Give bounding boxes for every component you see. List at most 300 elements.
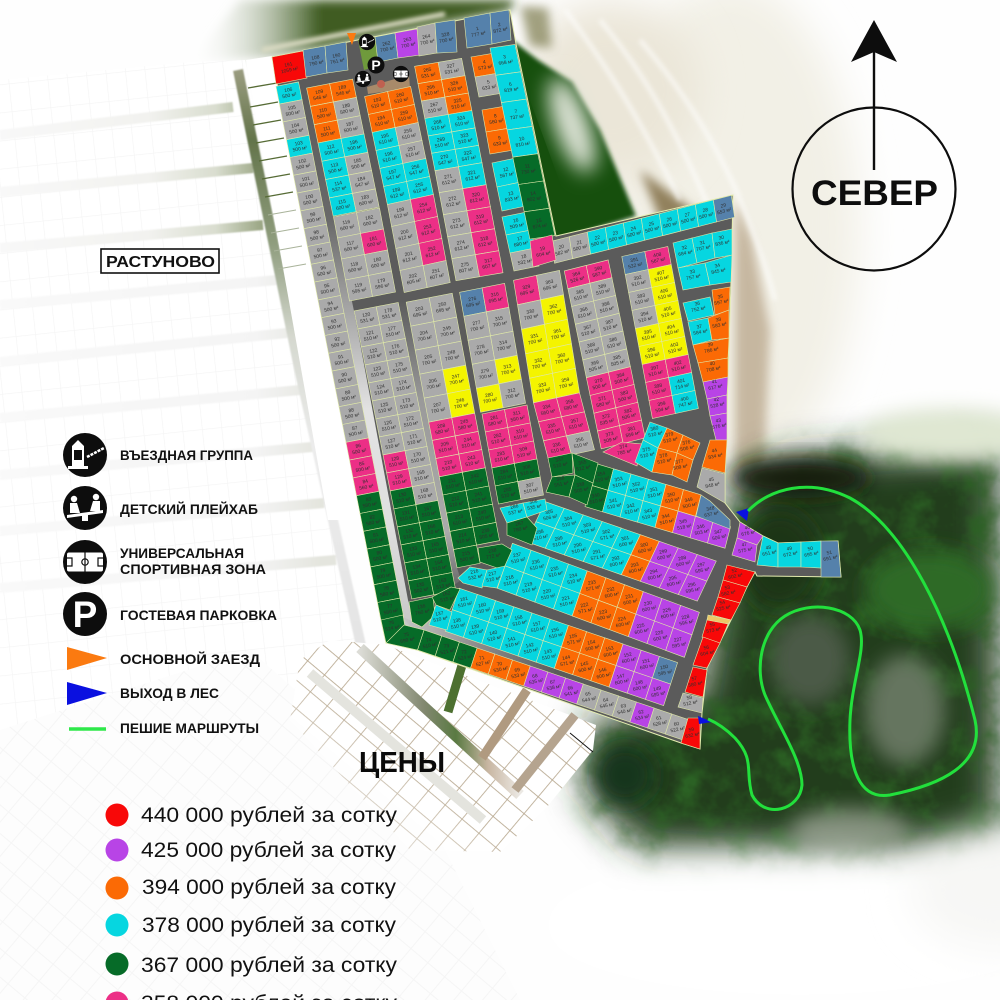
plots block: 116-119 and 182-179: 182 xyxy=(365,215,374,222)
plots block: 265-270 and 327-322: 531 м² xyxy=(421,72,437,80)
plots block: west strip 106-77: 84 xyxy=(362,480,369,485)
plots: irregular parcels: 757 м² xyxy=(686,273,702,282)
plots block: southern row 74-60: 71 xyxy=(479,656,485,662)
plots block: 329-333 and 363-359: 700 м² xyxy=(532,362,547,371)
plots block: 334-336 and 358-356: 356 xyxy=(575,437,584,444)
plots block: 120-135 and 178-163: 513 м² xyxy=(436,582,451,591)
plots block: 237-228 and 218-227: 222 xyxy=(580,603,589,609)
plots block: 161-150 and 138-149: 595 м² xyxy=(658,669,673,678)
plots block: 276-280 and 316-312: 277 xyxy=(472,321,481,327)
plots block: north-east row 20-29: 23 xyxy=(612,231,619,237)
plots block: 4-5: 573 м² xyxy=(478,64,494,72)
plots block: east strip 3-15: 10 xyxy=(519,137,525,143)
plots block: 354-349 and 340-347: 341 xyxy=(609,498,618,505)
plots block: 12-13: 13 xyxy=(508,191,514,197)
plots block: 120-135 and 178-163: 130 xyxy=(398,492,407,499)
plots block: 109-115 and 189-183: 500 м² xyxy=(343,126,359,134)
plots block: 334-336 and 358-356: 358 xyxy=(565,399,574,406)
plots block: west strip 106-77: 560 м² xyxy=(359,483,374,492)
plots block: north-east row 20-29: 28 xyxy=(702,208,709,214)
plots block: 120-135 and 178-163: 168 xyxy=(420,488,429,495)
plots block: 199-202 and 254-251: 612 м² xyxy=(398,233,414,242)
plots block: 120-135 and 178-163: 510 м² xyxy=(385,442,401,451)
plots block: 305-297 and 288-296: 305 xyxy=(545,510,554,516)
plots block: west strip 106-77: 98 xyxy=(313,230,320,236)
plots block: 120-135 and 178-163: 510 м² xyxy=(414,474,430,483)
plots: irregular parcels: 785 м² xyxy=(617,448,633,457)
plots: irregular parcels: 137 xyxy=(435,611,444,618)
plots block: 354-349 and 340-347: 510 м² xyxy=(642,512,657,521)
plots block: 199-202 and 254-251: 251 xyxy=(432,269,441,275)
plots block: 354-349 and 340-347: 340 xyxy=(591,493,600,500)
plots block: west strip 106-77: 93 xyxy=(331,319,337,325)
plots block: 305-297 and 288-296: 506 м² xyxy=(543,513,558,522)
plots block: north-east row 20-29: 500 м² xyxy=(663,221,678,230)
plots: irregular parcels: 651 м² xyxy=(762,549,778,558)
plots block: 203-207 and 250-246: 203 xyxy=(415,307,424,313)
plots block: 208-215 and 245-239: 510 м² xyxy=(438,446,454,455)
plots: irregular parcels: 51 xyxy=(826,551,833,557)
plots block: 193-198 and 260-255: 547 м² xyxy=(386,173,402,182)
plots: irregular parcels: 47 xyxy=(741,543,748,549)
plots block: 276-280 and 316-312: 700 м² xyxy=(497,344,512,353)
plots block: 281-285 and 311-307: 285 xyxy=(503,487,512,494)
plots block: east strip 3-15: 14 xyxy=(530,192,537,197)
plots block: southern row 74-60 xyxy=(418,630,690,740)
plots block: 265-270 and 327-322: 510 м² xyxy=(428,106,443,115)
plots block: 237-228 and 218-227: 600 м² xyxy=(634,627,650,636)
plots block: southern row 74-60: 535 м² xyxy=(528,677,544,686)
plots: irregular parcels: 55 xyxy=(709,623,716,629)
plots: irregular parcels: 700 м² xyxy=(420,38,436,47)
plots block: 161-150 and 138-149: 150 xyxy=(660,665,669,672)
plots block: 109-115 and 189-183: 189 xyxy=(338,85,347,92)
plots block: 265-270 and 327-322: 510 м² xyxy=(448,85,463,93)
legend text: forest exit: ВЫХОД В ЛЕС xyxy=(120,686,219,701)
plots block: 237-228 and 218-227: 226 xyxy=(655,630,664,637)
plots: irregular parcels: 525 м² xyxy=(716,604,732,613)
plots block: 391-399 and 408-400: 396 xyxy=(647,348,656,354)
plots block: 391-399 and 408-400: 510 м² xyxy=(658,292,673,301)
icon: parking on map: P xyxy=(371,57,381,73)
plots block: 334-336 and 358-356: 357 xyxy=(570,418,579,425)
plots block: 161-150 and 138-149: 595 м² xyxy=(651,690,666,699)
plots block: 203-207 and 250-246: 246 xyxy=(456,398,465,405)
plots block: north-east row 20-29: 500 м² xyxy=(591,239,606,249)
plots block: 109-115 and 189-183: 113 xyxy=(330,163,339,169)
plots block: 120-135 and 178-163: 134 xyxy=(412,564,421,571)
plots block: 364-373 and 390-381: 510 м² xyxy=(599,305,615,315)
plots: irregular parcels: 836 м² xyxy=(715,239,731,248)
plots: irregular parcels: 505 м² xyxy=(574,486,590,495)
plots block: 193-198 and 260-255: 193 xyxy=(373,98,382,104)
plots block: 265-270 and 327-322: 547 м² xyxy=(438,159,454,167)
plots block: 8-9: 9 xyxy=(498,136,501,142)
plots block: 199-202 and 254-251: 200 xyxy=(400,230,409,236)
plots block: east strip 3-15: 668 м² xyxy=(498,59,514,67)
plots block: 193-198 and 260-255: 257 xyxy=(407,147,416,153)
plots: irregular parcels: 632 м² xyxy=(685,731,701,740)
plots block: 161-150 and 138-149: 600 м² xyxy=(639,662,655,671)
plots block: 208-215 and 245-239: 510 м² xyxy=(442,464,458,473)
plots: irregular parcels: 604 м² xyxy=(536,250,552,259)
plots block: 265-270 and 327-322: 510 м² xyxy=(424,89,440,97)
plots block: 120-135 and 178-163: 510 м² xyxy=(432,564,448,573)
plots block: 120-135 and 178-163: 121 xyxy=(366,330,375,337)
plots block: west strip 106-77: 500 м² xyxy=(334,359,350,367)
plots block: north-east row 20-29: 500 м² xyxy=(681,216,696,226)
plots block: 265-270 and 327-322: 323 xyxy=(460,133,469,140)
plots block: 305-297 and 288-296: 600 м² xyxy=(647,573,663,582)
plots block: 354-349 and 340-347: 352 xyxy=(632,482,641,489)
plots: irregular parcels: 31 xyxy=(699,241,706,247)
plots block: southern row 74-60: 541 м² xyxy=(564,689,580,698)
plots block: 203-207 and 250-246: 247 xyxy=(451,374,460,381)
plots block: 237-228 and 218-227: 510 м² xyxy=(503,579,519,588)
plots block: 281-285 and 311-307: 580 м² xyxy=(488,419,503,428)
plots block: 364-373 and 390-381: 505 м² xyxy=(588,364,604,374)
plots block: 354-349 and 340-347 xyxy=(585,464,736,548)
plots block: 391-399 and 408-400: 510 м² xyxy=(671,364,687,373)
plots block: 208-215 and 245-239: 212 xyxy=(451,497,460,503)
plots block: 120-135 and 178-163: 123 xyxy=(373,366,382,373)
plots: irregular parcels: 575 м² xyxy=(738,546,754,555)
plots: irregular parcels: 34 xyxy=(714,264,721,270)
plots block: west strip 106-77: 500 м² xyxy=(373,554,388,563)
plots block: southern row 74-60: 530 м² xyxy=(493,665,509,674)
plots block: 237-228 and 218-227: 510 м² xyxy=(567,577,583,586)
plots block: 271-275 and 321-317: 612 м² xyxy=(478,240,493,249)
plots block: west strip 106-77: 500 м² xyxy=(320,287,336,296)
plots block: 203-207 and 250-246: 250 xyxy=(438,302,447,309)
plots block: southern row 74-60: 72 xyxy=(461,650,468,656)
plots block: 193-198 and 260-255: 258 xyxy=(404,129,413,135)
plots block: 203-207 and 250-246: 249 xyxy=(442,326,451,333)
plots block: 193-198 and 260-255: 510 м² xyxy=(405,150,421,159)
plots: irregular parcels: 53 xyxy=(724,586,731,592)
plots block: 109-115 and 189-183: 500 м² xyxy=(324,148,340,157)
plots block: 391-399 and 408-400: 394 xyxy=(640,312,649,318)
plots block: 271-275 and 321-317: 273 xyxy=(452,219,461,225)
plots: irregular parcels: 872 м² xyxy=(493,26,509,35)
plots block: southern row 74-60: 73 xyxy=(443,644,450,650)
plots: irregular parcels: 338 xyxy=(556,476,565,483)
plots block: 161-150 and 138-149: 155 xyxy=(569,634,578,641)
plots block: 271-275 and 321-317: 612 м² xyxy=(442,178,457,187)
plots: irregular parcels: 790 м² xyxy=(309,59,325,68)
plots block: 199-202 and 254-251: 253 xyxy=(423,225,432,231)
plots block: north-east row 20-29: 500 м² xyxy=(699,211,714,221)
plots block: 276-280 and 316-312: 700 м² xyxy=(474,349,490,357)
plots block: 4-5: 4 xyxy=(483,60,486,66)
plots block: 116-119 and 182-179: 600 м² xyxy=(363,219,378,228)
plots block: north-east row 20-29: 21 xyxy=(576,240,583,246)
plots block: 237-228 and 218-227: 224 xyxy=(618,617,627,623)
plots block: 120-135 and 178-163: 171 xyxy=(409,434,418,441)
plots: irregular parcels: 515 м² xyxy=(440,595,456,604)
legend text: walking routes: ПЕШИЕ МАРШРУТЫ xyxy=(120,721,259,736)
plots block: west strip 106-77: 92 xyxy=(334,337,341,343)
plots block: 354-349 and 340-347: 510 м² xyxy=(630,486,645,495)
plots block: west strip 106-77: 89 xyxy=(345,391,351,396)
plots block: 193-198 and 260-255: 256 xyxy=(411,165,420,171)
plots block: 237-228 and 218-227: 225 xyxy=(636,623,645,630)
plots block: 237-228 and 218-227: 237 xyxy=(513,553,522,559)
plots block: 391-399 and 408-400 xyxy=(622,246,698,418)
plots: irregular parcels: 49 xyxy=(786,547,793,553)
plots block: 265-270 and 327-322: 268 xyxy=(433,120,442,126)
plots block: 354-349 and 340-347: 506 м² xyxy=(712,533,727,542)
plots block: west strip 106-77: 83 xyxy=(366,497,372,503)
plots block: 109-115 and 189-183: 500 м² xyxy=(320,130,336,139)
plots block: 276-280 and 316-312: 313 xyxy=(503,364,512,371)
plots: irregular parcels: 848 м² xyxy=(705,481,721,490)
plots block: 199-202 and 254-251: 202 xyxy=(409,274,418,280)
plots block: 161-150 and 138-149: 148 xyxy=(635,680,644,687)
plots block: 109-115 and 189-183: 537 м² xyxy=(332,185,348,194)
plots: irregular parcels: 37 xyxy=(696,325,703,331)
plots block: 208-215 and 245-239: 214 xyxy=(458,533,467,539)
plots: irregular parcels: 48 xyxy=(765,546,772,552)
plots block: southern row 74-60: 60 xyxy=(674,722,680,728)
plots block: 120-135 and 178-163: 510 м² xyxy=(363,334,379,343)
plots: irregular parcels: 286 xyxy=(510,504,519,511)
plots block: west strip 106-77: 500 м² xyxy=(324,305,339,314)
plots block: 109-115 and 189-183 xyxy=(307,79,379,216)
plots block: 4-5 xyxy=(471,53,503,97)
plots block: 199-202 and 254-251: 199 xyxy=(396,208,405,214)
plots block: 109-115 and 189-183: 110 xyxy=(319,108,328,114)
plots: irregular parcels: 2 xyxy=(498,23,501,28)
plots block: 120-135 and 178-163: 122 xyxy=(369,348,378,355)
plots block: 120-135 and 178-163: 177 xyxy=(388,326,397,333)
plots block: east strip 3-15: 810 м² xyxy=(515,141,531,149)
plots block: 193-198 and 260-255: 198 xyxy=(392,188,401,194)
plots block: 193-198 and 260-255: 510 м² xyxy=(378,137,394,146)
plots block: 237-228 and 218-227: 218 xyxy=(505,575,514,582)
plots block: 237-228 and 218-227: 600 м² xyxy=(615,620,631,629)
plots block: 208-215 and 245-239: 510 м² xyxy=(456,537,472,546)
plots block: 237-228 and 218-227: 571 м² xyxy=(585,584,601,593)
plots block: 120-135 and 178-163: 510 м² xyxy=(374,388,390,397)
plots block: 364-373 and 390-381: 370 xyxy=(594,378,603,385)
plots block: 161-150 and 138-149: 510 м² xyxy=(487,634,503,643)
plots block: 391-399 and 408-400: 399 xyxy=(657,402,666,408)
plots block: 208-215 and 245-239: 242 xyxy=(471,474,480,480)
plots: irregular parcels: 19 xyxy=(539,247,546,253)
plots block: east strip 3-15: 874 м² xyxy=(532,223,548,231)
plots: irregular parcels: 510 м² xyxy=(648,430,664,439)
plots block: 391-399 and 408-400: 510 м² xyxy=(668,346,683,355)
plots block: 271-275 and 321-317: 612 м² xyxy=(454,244,470,253)
plots block: 329-333 and 363-359: 700 м² xyxy=(555,357,570,366)
plots block: 161-150 and 138-149: 510 м² xyxy=(530,625,546,634)
plots block: 281-285 and 311-307: 510 м² xyxy=(513,433,529,442)
plots block: 120-135 and 178-163: 510 м² xyxy=(421,510,437,519)
plots block: 120-135 and 178-163: 510 м² xyxy=(393,366,408,375)
plots block: 354-349 and 340-347: 346 xyxy=(696,524,705,531)
plots block: 329-333 and 363-359: 329 xyxy=(522,285,531,291)
plots block: 305-297 and 288-296: 304 xyxy=(564,516,573,523)
plots block: 237-228 and 218-227: 600 м² xyxy=(597,613,612,622)
plots: irregular parcels: 700 м² xyxy=(401,41,417,50)
plots: irregular parcels: 40 xyxy=(709,362,716,368)
plots: irregular parcels: 378 xyxy=(659,453,668,460)
plots block: 16-18: 509 м² xyxy=(509,222,525,231)
plots block: 391-399 and 408-400: 510 м² xyxy=(652,387,667,396)
plots block: 193-198 and 260-255: 196 xyxy=(384,152,393,158)
plots block: west strip 106-77: 102 xyxy=(298,159,307,165)
plots block: 161-150 and 138-149: 141 xyxy=(507,637,516,643)
plots block: west strip 106-77: 500 м² xyxy=(299,181,315,189)
plots: irregular parcels: 772 м² xyxy=(486,552,502,561)
plots block: north-east row 20-29: 500 м² xyxy=(609,234,624,244)
top treeline xyxy=(190,0,515,62)
entrance garden and playground xyxy=(358,38,410,94)
plots block: 364-373 and 390-381: 381 xyxy=(627,426,636,433)
plots block: 208-215 and 245-239: 510 м² xyxy=(452,519,468,527)
plots block: 276-280 and 316-312: 280 xyxy=(485,393,494,399)
plots block: 281-285 and 311-307: 510 м² xyxy=(520,469,536,478)
plots block: 354-349 and 340-347: 354 xyxy=(597,472,606,478)
plots block: 161-150 and 138-149: 161 xyxy=(460,597,469,603)
legend icon: walking route line xyxy=(69,727,106,731)
plots block: west strip 106-77: 500 м² xyxy=(303,198,318,207)
plots block: 161-150 and 138-149: 510 м² xyxy=(457,600,473,609)
plots block: 203-207 and 250-246: 204 xyxy=(419,331,428,337)
plots block: 281-285 and 311-307: 282 xyxy=(493,433,502,440)
plots block: north-east row 20-29: 22 xyxy=(594,236,601,242)
cream beach tone xyxy=(600,0,860,480)
plots block: 208-215 and 245-239: 215 xyxy=(462,551,471,558)
plots block: 305-297 and 288-296: 510 м² xyxy=(571,547,587,556)
plots block: 391-399 and 408-400: 403 xyxy=(670,343,679,349)
plots block: 265-270 and 327-322: 327 xyxy=(446,64,456,70)
plots block: 161-150 and 138-149: 142 xyxy=(525,643,534,650)
plots block: southern row 74-60: 61 xyxy=(656,716,662,722)
plots block: 391-399 and 408-400: 510 м² xyxy=(654,274,670,283)
plots: irregular parcels: 44 xyxy=(711,449,718,455)
plots block: 120-135 and 178-163: 510 м² xyxy=(367,352,383,361)
plots block: 109-115 and 189-183: 185 xyxy=(353,158,362,165)
plots block: east strip 3-15: 802 м² xyxy=(527,195,543,203)
plots block: 203-207 and 250-246: 700 м² xyxy=(426,383,442,391)
plots: irregular parcels: 573 м² xyxy=(706,626,722,635)
site road base xyxy=(272,10,841,749)
plots block: 237-228 and 218-227: 571 м² xyxy=(578,607,594,616)
plots: irregular parcels: 35 xyxy=(717,295,724,301)
plots block: north-east row 20-29: 24 xyxy=(630,226,637,233)
plots block: 276-280 and 316-312: 700 м² xyxy=(505,392,521,401)
plots block: 161-150 and 138-149: 600 м² xyxy=(603,650,619,659)
plots block: 391-399 and 408-400: 510 м² xyxy=(661,310,677,319)
plots block: 109-115 and 189-183: 114 xyxy=(334,181,343,188)
plots block: 354-349 and 340-347: 510 м² xyxy=(624,507,640,516)
plots block: 120-135 and 178-163: 125 xyxy=(380,402,389,409)
plots: irregular parcels: 287 xyxy=(515,521,524,528)
plots block: 120-135 and 178-163: 510 м² xyxy=(425,528,441,537)
plots block: 161-150 and 138-149: 510 м² xyxy=(505,641,521,650)
plots block: 334-336 and 358-356: 510 м² xyxy=(550,446,566,455)
plots block: 161-150 and 138-149: 151 xyxy=(642,659,651,665)
plots block: 364-373 and 390-381: 580 м² xyxy=(596,400,611,409)
plots: irregular parcels: 38 xyxy=(715,318,722,324)
plots block: 305-297 and 288-296: 289 xyxy=(554,536,563,543)
legend icon: parking: P xyxy=(73,594,97,635)
plots block: 116-119 and 182-179: 600 м² xyxy=(344,245,359,254)
plots block: 364-373 and 390-381: 505 м² xyxy=(610,359,626,368)
plots block: west strip 106-77: 500 м² xyxy=(348,430,364,438)
plots block: 281-285 and 311-307: 284 xyxy=(500,469,509,476)
plots block: 208-215 and 245-239: 510 м² xyxy=(445,482,461,491)
plots block: 199-202 and 254-251: 605 м² xyxy=(406,277,422,286)
plots block: 120-135 and 178-163: 510 м² xyxy=(396,384,412,393)
plots block: 391-399 and 408-400: 567 м² xyxy=(651,256,666,265)
plots block: 391-399 and 408-400: 747 м² xyxy=(678,400,694,409)
plots block: 391-399 and 408-400: 395 xyxy=(644,330,653,336)
plots: irregular parcels: 509 м² xyxy=(673,463,689,472)
plots block: 193-198 and 260-255: 510 м² xyxy=(371,101,387,110)
plots block: 161-150 and 138-149: 145 xyxy=(580,662,589,668)
plots block: 364-373 and 390-381: 510 м² xyxy=(596,287,611,297)
plots block: 193-198 and 260-255: 195 xyxy=(381,134,390,140)
plots block: 334-336 and 358-356: 334 xyxy=(542,404,551,411)
plots: irregular parcels: 551 м² xyxy=(554,480,570,489)
plots block: 281-285 and 311-307: 310 xyxy=(516,429,525,435)
plots block: 120-135 and 178-163: 510 м² xyxy=(378,406,393,415)
plots block: 265-270 and 327-322: 510 м² xyxy=(451,102,467,111)
plots block: 199-202 and 254-251: 612 м² xyxy=(425,250,441,259)
plots: irregular parcels: 42 xyxy=(713,398,720,404)
plots: irregular parcels: 510 м² xyxy=(640,451,656,460)
plots block: 281-285 and 311-307: 307 xyxy=(526,483,535,489)
plots block: 161-150 and 138-149: 147 xyxy=(616,674,625,681)
plots block: 265-270 and 327-322: 325 xyxy=(453,99,462,105)
walking route xyxy=(708,487,976,809)
plots block: west strip 106-77: 580 м² xyxy=(380,590,395,599)
plots block: 199-202 and 254-251: 252 xyxy=(427,247,436,253)
plots: irregular parcels: 695 м² xyxy=(804,550,820,559)
plots: irregular parcels: 834 м² xyxy=(708,452,724,461)
southern road fade xyxy=(403,606,560,682)
plots block: 120-135 and 178-163: 127 xyxy=(387,438,396,445)
plots block: 193-198 and 260-255: 547 м² xyxy=(409,168,425,177)
plots block: 208-215 and 245-239: 580 м² xyxy=(435,428,450,436)
plots block: 281-285 and 311-307: 510 м² xyxy=(498,473,513,482)
icon: parking on map xyxy=(368,56,384,74)
plots block: 109-115 and 189-183: 115 xyxy=(338,200,347,206)
plots block: 120-135 and 178-163: 531 м² xyxy=(360,316,375,325)
plots block: 208-215 and 245-239: 510 м² xyxy=(449,500,465,509)
plots block: 193-198 and 260-255: 612 м² xyxy=(390,191,406,200)
plots: irregular parcels: 238 xyxy=(488,548,497,555)
plots block: 265-270 and 327-322: 266 xyxy=(426,85,435,91)
plots block: 120-135 and 178-163: 178 xyxy=(384,308,393,315)
plots block: 391-399 and 408-400: 391 xyxy=(630,258,639,264)
plots block: 271-275 and 321-317: 319 xyxy=(476,215,485,221)
plots block: 305-297 and 288-296: 600 м² xyxy=(619,540,634,549)
plots block: 161-150 and 138-149: 144 xyxy=(562,655,571,662)
plots block: east strip 3-15: 6 xyxy=(509,83,512,88)
plots block: 120-135 and 178-163: 132 xyxy=(405,528,414,535)
plots block: west strip 106-77: 90 xyxy=(341,373,348,379)
plots block: 364-373 and 390-381: 535 м² xyxy=(599,418,615,427)
plots block: west strip 106-77: 500 м² xyxy=(296,163,311,171)
plots: irregular parcels: 45 xyxy=(708,478,715,484)
plots block: 161-150 and 138-149: 140 xyxy=(489,631,498,637)
plots block: 329-333 and 363-359: 700 м² xyxy=(559,381,574,391)
neighbouring plots, south xyxy=(0,650,520,1000)
